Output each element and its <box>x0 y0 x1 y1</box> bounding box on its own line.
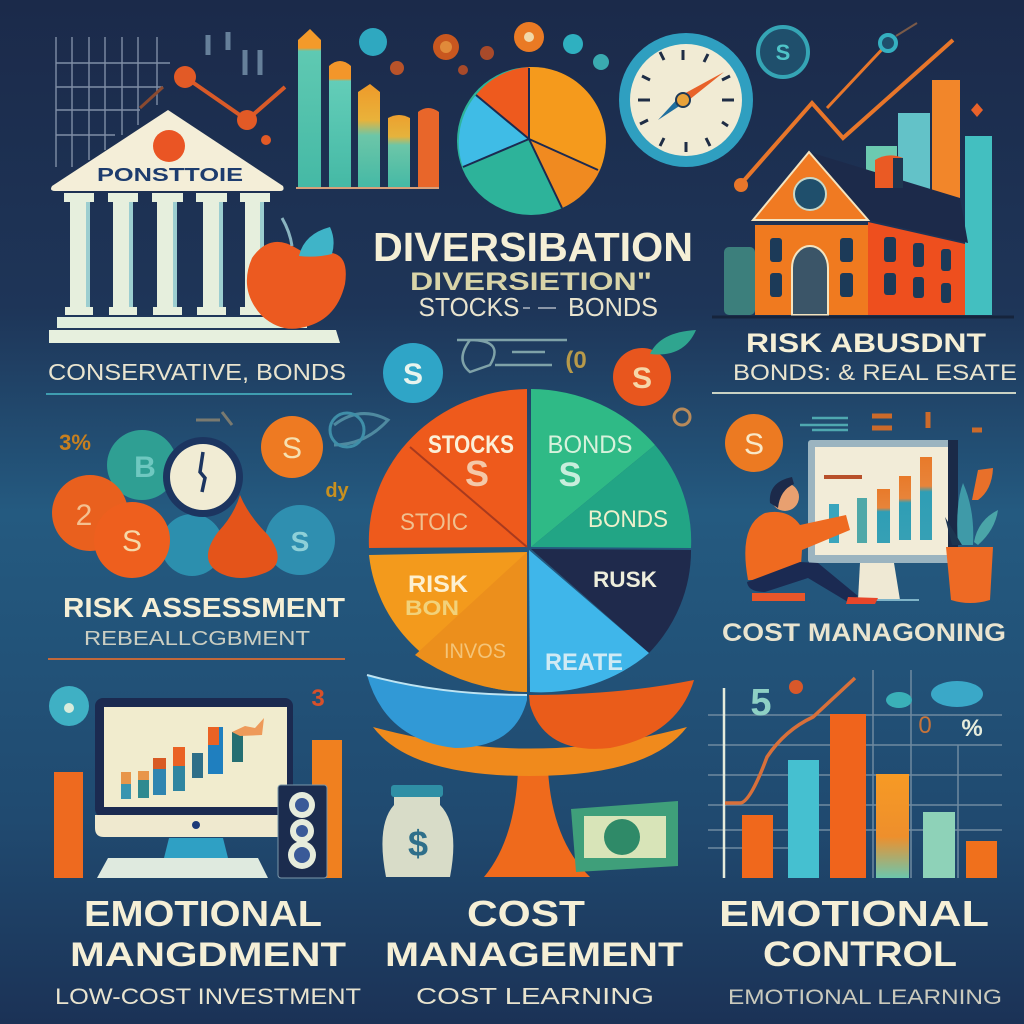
icon: scale bowls <box>367 675 694 749</box>
icon: small symbols <box>750 680 983 742</box>
icon: clock gauge <box>619 33 753 167</box>
pie slice: risk <box>369 552 527 692</box>
pie slice: stocks <box>369 389 527 548</box>
icon: dollar coin centre <box>383 343 443 403</box>
icon: faint leaf left <box>334 414 388 445</box>
chart: central pie: RISK <box>408 571 469 598</box>
panel: emotional control <box>708 670 1002 1009</box>
icon: clock <box>163 437 243 517</box>
chart: central pie: S <box>465 453 489 494</box>
icon: coin pile: 2 <box>76 499 92 532</box>
panel: emotional control: CONTROL <box>763 935 957 974</box>
icon: banknote <box>571 801 678 872</box>
icon: money jar <box>382 785 453 877</box>
label: COST MANAGONING <box>722 619 1006 647</box>
icon: dollar coin centre: S <box>403 358 423 391</box>
icon: small glyphs <box>59 412 364 502</box>
icon: coin pile: S <box>282 432 302 465</box>
panel: emotional control: EMOTIONAL LEARNING <box>728 986 1002 1009</box>
grid backdrop <box>708 670 1002 878</box>
icon: coin <box>49 686 89 726</box>
chart: central pie: STOCKS <box>428 431 514 459</box>
panel: conservative bonds <box>46 32 352 394</box>
chart: central pie: REATE <box>545 649 623 676</box>
chart: central pie <box>369 389 691 692</box>
icon: coin pile: S <box>291 526 309 557</box>
icon: orange fruit: S <box>632 362 652 395</box>
icon: coin: S <box>744 428 764 461</box>
chart: central pie: BON <box>405 597 459 620</box>
pie slice: real estate <box>529 550 649 692</box>
axis <box>723 688 725 878</box>
chart: central pie: INVOS <box>444 640 506 663</box>
icon: potted plant <box>945 468 998 603</box>
heading: diversification: DIVERSIETION" <box>410 268 652 296</box>
panel: emotional management: MANGDMENT <box>70 936 346 974</box>
icon: dollar coin top right <box>758 27 808 77</box>
icon: apple <box>247 218 346 329</box>
icon: faint key sketch <box>457 340 567 372</box>
icon: seated person <box>745 477 878 604</box>
icon: computer <box>95 698 293 878</box>
chart: central pie: S <box>559 456 581 494</box>
panel: top bar chart <box>296 29 439 188</box>
icon: small glyphs: 3% <box>59 430 91 455</box>
label: RISK ASSESSMENT <box>63 592 345 623</box>
icon: house <box>753 152 968 315</box>
pie slice: bonds <box>531 389 655 547</box>
chart: central pie: BONDS <box>548 431 632 459</box>
chart: central pie: STOIC <box>400 509 468 536</box>
icon: faint columns sketch <box>208 32 260 75</box>
panel: diversification pie <box>457 67 606 215</box>
chart: central pie: RUSK <box>593 567 657 592</box>
icon: speaker <box>278 785 327 878</box>
heading: diversification: STOCKS <box>418 292 520 322</box>
icon: coin pile <box>52 416 335 578</box>
panel: cost management: COST LEARNING <box>416 983 654 1009</box>
icon: small glyphs <box>800 418 848 430</box>
trend line <box>725 678 855 803</box>
icon: small glyph right of pie <box>674 409 690 425</box>
bar chart <box>742 714 997 878</box>
icon: orange fruit <box>613 330 696 406</box>
icon: pear <box>208 495 278 578</box>
panel: cost management <box>382 785 683 1009</box>
heading: diversification: DIVERSIBATION <box>373 224 693 270</box>
icon: small symbols: % <box>961 715 983 742</box>
icon: gold glyph: (0 <box>565 347 587 374</box>
grid backdrop <box>56 37 170 167</box>
chart: central pie: BONDS <box>588 506 668 533</box>
trend line <box>734 23 953 192</box>
icon: small symbols: 0 <box>918 712 932 739</box>
panel: cost management: MANAGEMENT <box>385 936 683 974</box>
icon: top coins <box>359 22 609 75</box>
pie slice: rusk <box>531 549 691 653</box>
bar right <box>312 740 342 878</box>
icon: dollar coin top right: S <box>776 40 790 65</box>
label: CONSERVATIVE, BONDS <box>48 359 346 385</box>
label: EMOTIONAL <box>719 893 989 934</box>
panel: real estate: BONDS: & REAL ESATE <box>733 360 1017 385</box>
icon: small symbols: 5 <box>750 682 772 724</box>
icon: small glyph: 3 <box>311 685 325 712</box>
icon: bank building: PONSTTOIE <box>97 165 243 185</box>
icon: coin pile: B <box>134 451 156 484</box>
label: RISK ABUSDNT <box>746 328 987 358</box>
icon: coin pile: S <box>122 525 142 558</box>
icon: small orange glyphs <box>872 412 982 430</box>
panel: real estate <box>712 23 1017 393</box>
icon: money jar: $ <box>408 823 428 864</box>
icon: small glyphs: dy <box>325 480 350 502</box>
heading: diversification: BONDS <box>568 292 658 322</box>
panel: risk assessment <box>48 412 364 659</box>
label: COST <box>467 893 585 934</box>
bar left <box>54 772 83 878</box>
heading: diversification <box>373 224 693 322</box>
panel: cost managing <box>722 412 1006 647</box>
icon: monitor with chart <box>808 440 958 600</box>
panel: emotional management <box>49 685 361 1009</box>
icon: coin <box>725 414 783 472</box>
panel: emotional management: LOW-COST INVESTMENT <box>55 984 361 1009</box>
icon: trend line <box>140 66 285 145</box>
label: EMOTIONAL <box>84 893 322 934</box>
icon: scale saucer and stand <box>373 727 687 877</box>
icon: bank building <box>49 110 340 343</box>
bars <box>724 80 992 315</box>
panel: risk assessment: REBEALLCGBMENT <box>84 628 310 650</box>
